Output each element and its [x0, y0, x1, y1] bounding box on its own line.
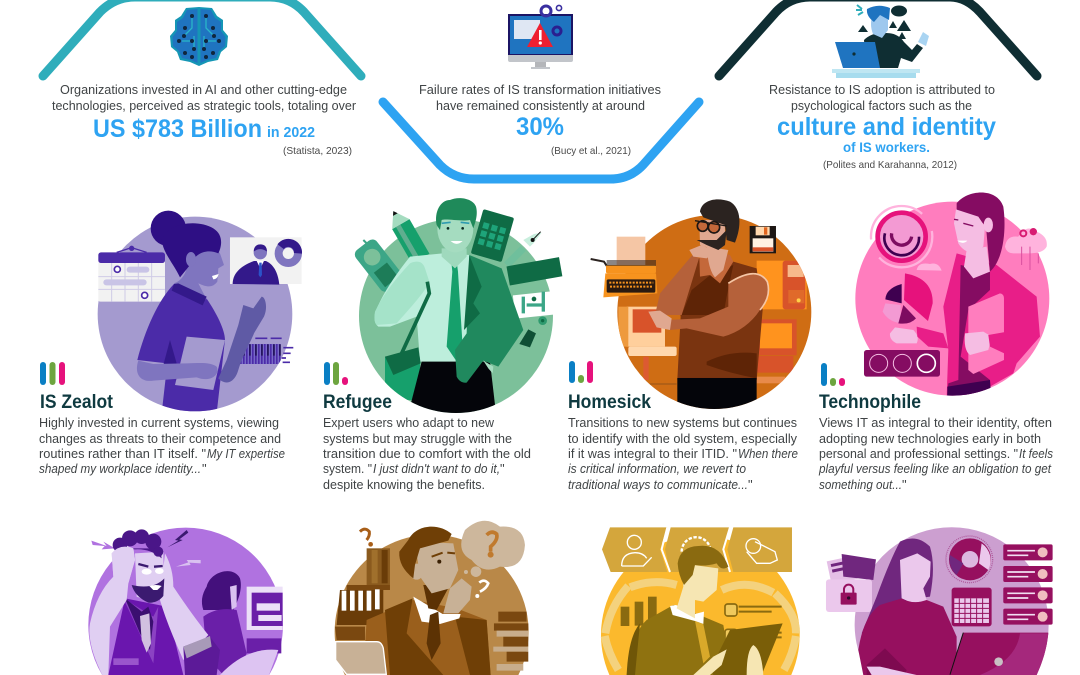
text: investment description: technologies, perceived as strategic tools, totaling over — [52, 98, 357, 113]
tally icon: two bars and dot — [324, 362, 348, 385]
stat: culture and identity — [777, 113, 996, 155]
description: Homesick: Transitions to new systems but continues — [568, 415, 797, 430]
illustration: confused man, brown — [335, 521, 529, 675]
description: IS Zealot: changes as threats to their competence and — [39, 431, 281, 446]
description: Refugee: " — [500, 461, 505, 476]
illustration: stressed man, purple — [88, 528, 283, 675]
text: failure description: Failure rates of IS transformation initiatives — [419, 82, 661, 97]
icon: stressed worker at laptop — [832, 5, 929, 78]
description: Homesick: is critical information, we revert to — [568, 461, 746, 476]
description: IS Zealot: routines rather than IT itself. " — [39, 446, 206, 461]
description: Refugee: despite knowing the benefits. — [323, 477, 485, 492]
description: Homesick — [568, 415, 798, 492]
description: Refugee: transition due to comfort with the old — [323, 446, 531, 461]
text: investment description: Organizations invested in AI and other cutting-edge — [60, 82, 347, 97]
text: resistance description: Resistance to IS adoption is attributed to — [769, 82, 995, 97]
description: Refugee: I just didn't want to do it, — [373, 461, 500, 476]
description: Technophile: personal and professional settings. " — [819, 446, 1018, 461]
description: Technophile: " — [902, 477, 907, 492]
stat: US $783 Billion: US $783 Billion — [93, 115, 262, 143]
icon: monitor with warning — [508, 5, 573, 69]
stat: culture and identity: of IS workers. — [843, 139, 930, 155]
stat: 30%: 30% — [516, 113, 564, 141]
description: Refugee: Expert users who adapt to new — [323, 415, 495, 430]
description: Technophile — [818, 415, 1053, 492]
illustration: woman with data charts — [855, 192, 1049, 400]
description: IS Zealot: My IT expertise — [207, 446, 285, 461]
tally icon: bar and two dots — [821, 363, 845, 386]
heading: Refugee: Refugee — [323, 391, 392, 413]
arc: teal bracket — [43, 0, 361, 76]
illustration: woman with tablet — [98, 211, 302, 413]
description: Technophile: Views IT as integral to their identity, often — [819, 415, 1052, 430]
panel: Refugee — [323, 198, 562, 492]
description: Homesick: traditional ways to communicate... — [568, 477, 748, 492]
panel: IS Zealot — [39, 211, 302, 476]
arc: dark bracket — [719, 0, 1037, 76]
tally icon: three bars — [40, 362, 65, 385]
heading: IS Zealot: IS Zealot — [40, 391, 113, 413]
description: Refugee: systems but may struggle with the — [323, 431, 512, 446]
description: Technophile: playful versus feeling like an obligation to get — [818, 461, 1052, 476]
arc: blue bracket — [383, 102, 699, 179]
text: resistance description: psychological factors such as the — [791, 98, 972, 113]
description: Refugee: system. " — [323, 461, 372, 476]
panel: AI investment statistic — [43, 0, 361, 157]
text: failure description: have remained consistently at around — [436, 98, 645, 113]
stat: US $783 Billion: in 2022 — [267, 124, 315, 141]
description: Technophile: something out... — [819, 477, 902, 492]
text: failure description — [419, 82, 661, 113]
text: investment description — [52, 82, 357, 113]
panel: failure rate statistic — [383, 5, 699, 179]
heading: Technophile: Technophile — [819, 391, 921, 413]
description: Homesick: if it was integral to their ITID. " — [568, 446, 737, 461]
description: IS Zealot: shaped my workplace identity... — [39, 461, 201, 476]
illustration: man with retro computers — [591, 199, 811, 415]
description: IS Zealot — [39, 415, 285, 476]
illustration: woman at laptop with secure data, mauve — [826, 527, 1053, 675]
illustration: man with old devices — [352, 198, 562, 413]
tally icon: bar dot bar — [569, 361, 593, 383]
description: Homesick: " — [748, 477, 753, 492]
text: resistance description — [769, 82, 995, 113]
citation: (Bucy et al., 2021) — [551, 145, 631, 157]
description: Homesick: When there — [738, 446, 798, 461]
description: Homesick: to identify with the old system, especially — [568, 431, 797, 446]
description: IS Zealot: Highly invested in current systems, viewing — [39, 415, 279, 430]
illustration: process-minded man, yellow — [601, 527, 800, 675]
heading: Homesick: Homesick — [568, 391, 651, 413]
panel: Technophile — [818, 192, 1053, 492]
panel: Homesick — [568, 199, 811, 492]
description: Technophile: It feels — [1019, 446, 1053, 461]
description: IS Zealot: " — [202, 461, 207, 476]
panel: resistance statistic — [719, 0, 1037, 171]
icon: circuit brain — [170, 7, 228, 66]
citation: (Polites and Karahanna, 2012) — [823, 159, 957, 171]
stat: culture and identity: culture and identity — [777, 113, 996, 141]
description: Refugee — [323, 415, 531, 492]
citation: (Statista, 2023) — [283, 145, 352, 157]
description: Technophile: adopting new technologies early in both — [819, 431, 1041, 446]
